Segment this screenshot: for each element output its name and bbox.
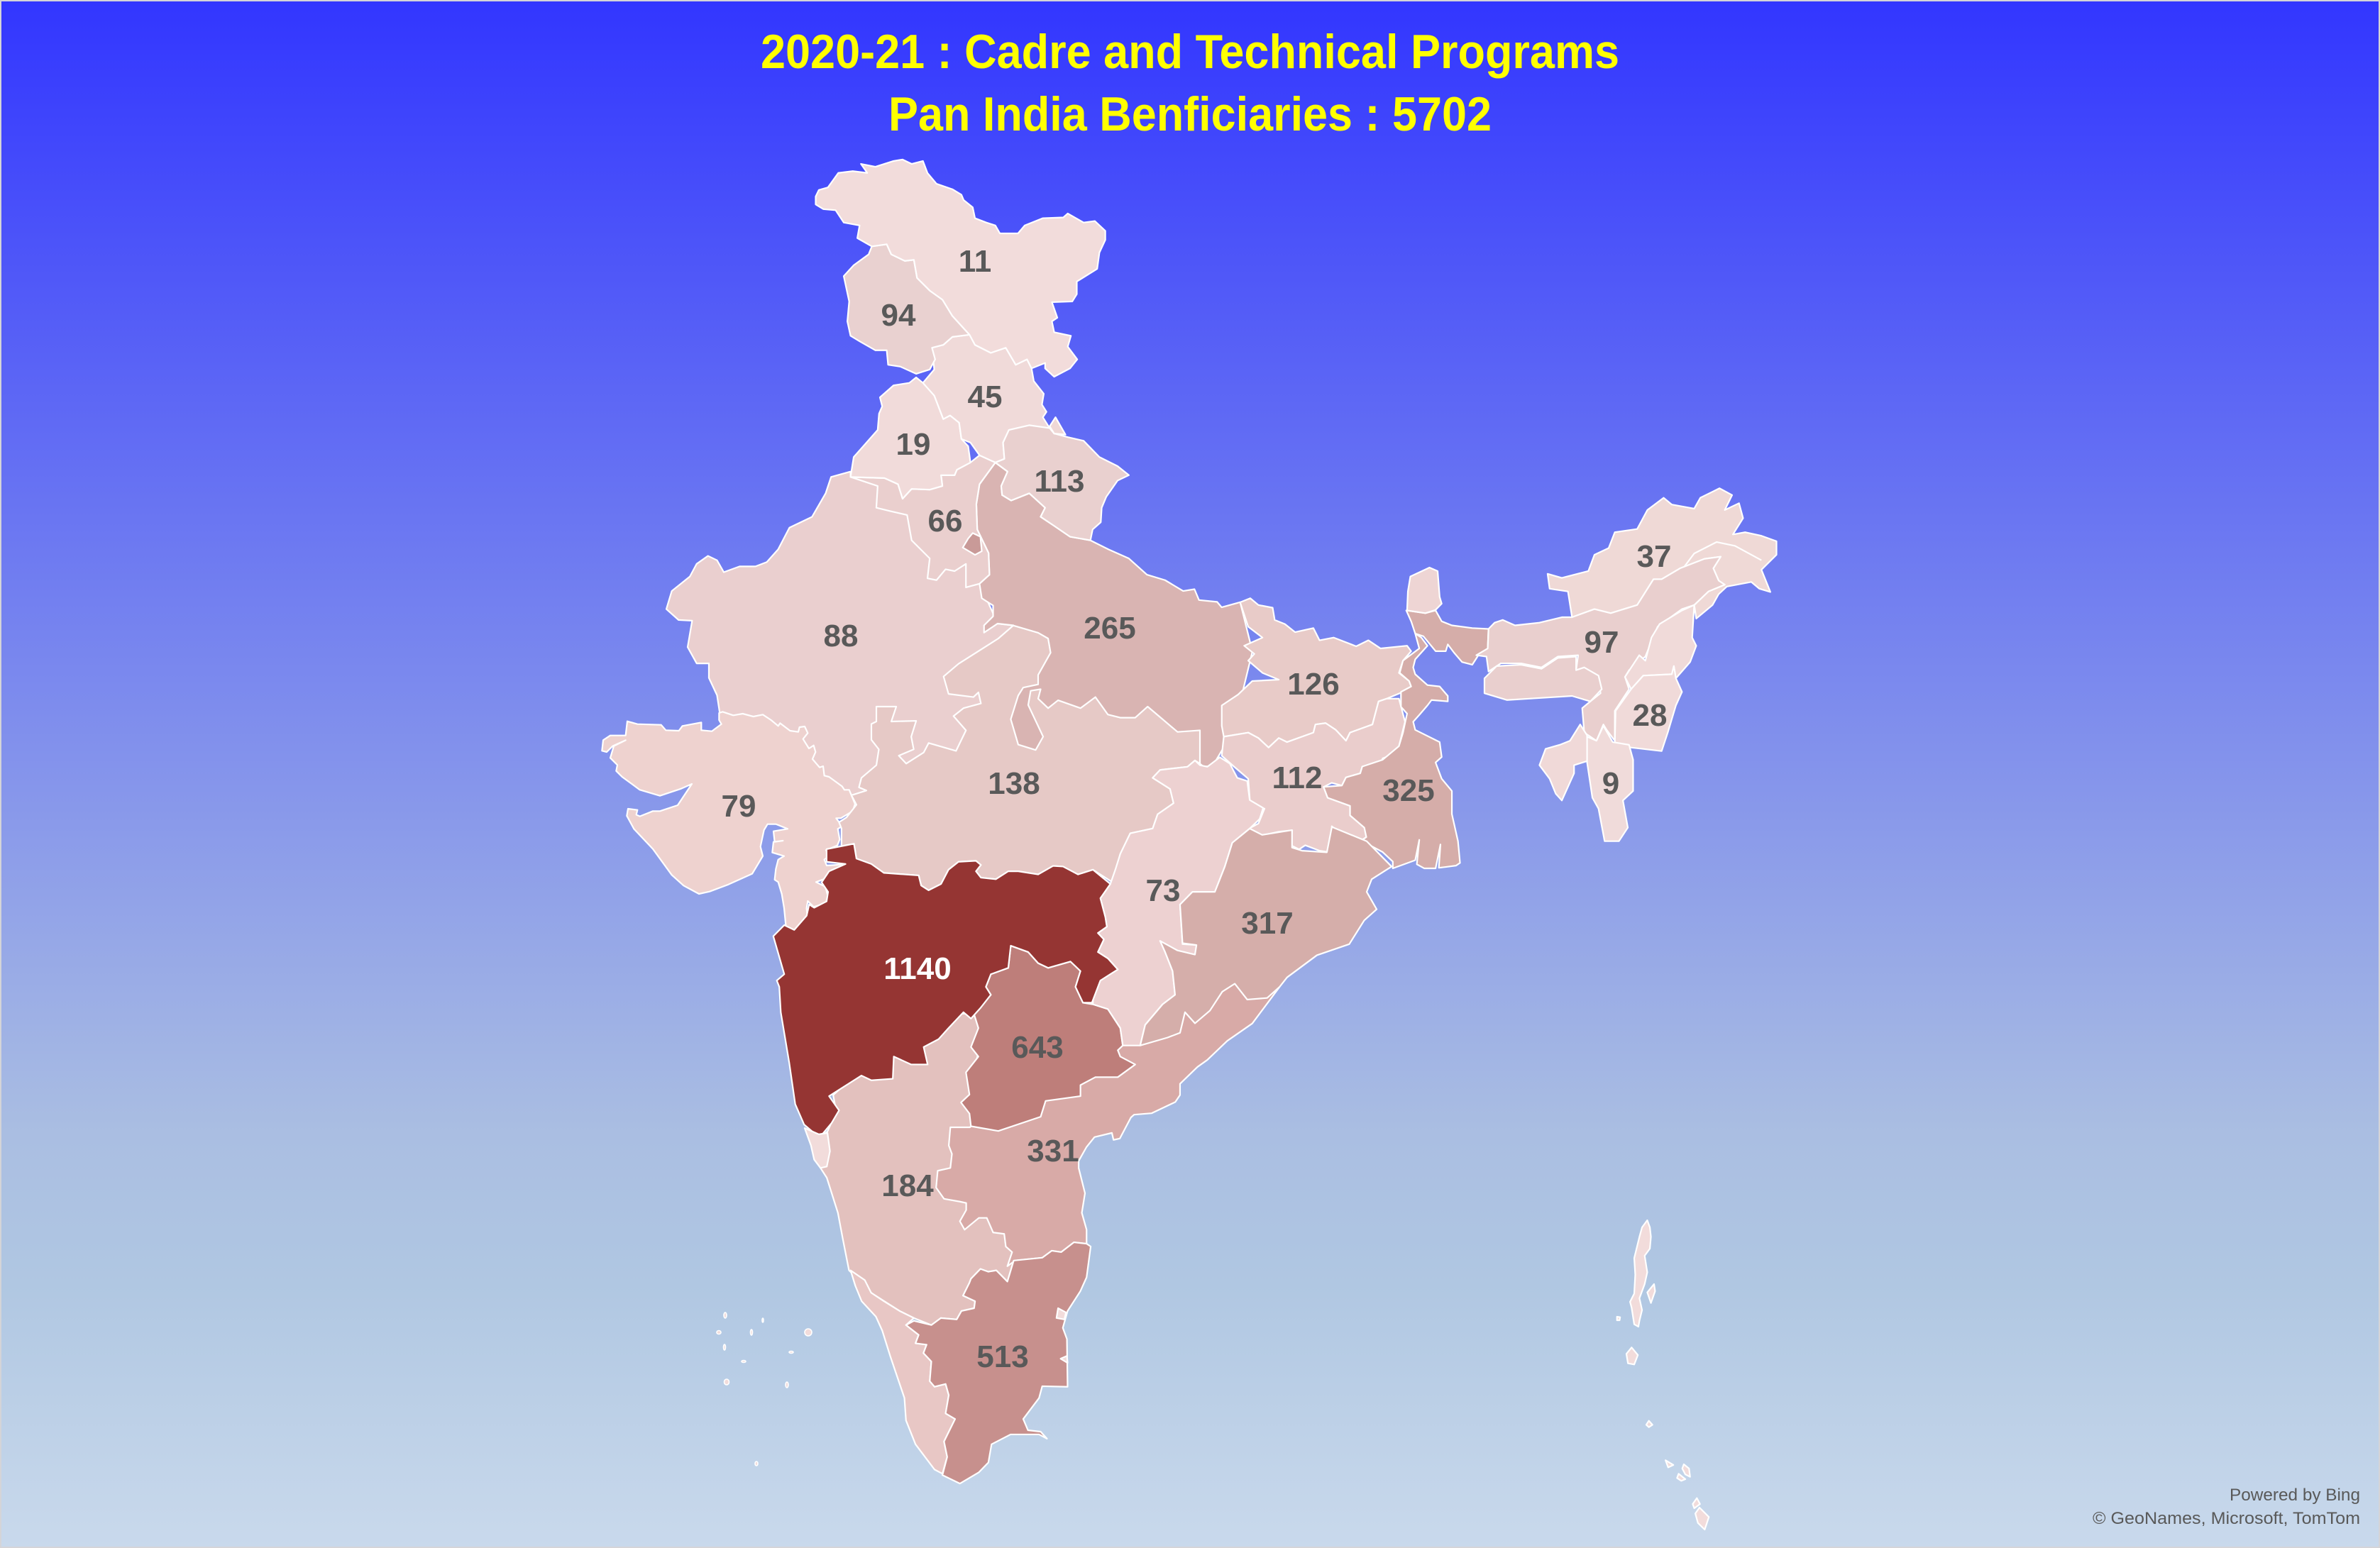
value labels per state: 138 xyxy=(988,766,1040,801)
state: Karnataka xyxy=(820,1014,1026,1325)
Lakshadweep islands xyxy=(717,1312,812,1466)
title xyxy=(761,25,1619,141)
island: Great Nicobar xyxy=(1695,1508,1709,1530)
state: Chhattisgarh xyxy=(1093,757,1263,1046)
state: Rajasthan xyxy=(666,472,1020,797)
state: Uttar Pradesh xyxy=(976,463,1252,767)
state: Andhra Pradesh xyxy=(936,980,1279,1266)
map credits: © GeoNames, Microsoft, TomTom xyxy=(2093,1509,2360,1528)
state: Bihar xyxy=(1222,598,1411,748)
state: Tamil Nadu xyxy=(906,1242,1091,1483)
island: North and Middle Andaman xyxy=(1630,1220,1651,1327)
value labels per state: 94 xyxy=(881,298,916,333)
value labels per state: 79 xyxy=(722,789,756,824)
state: Mizoram xyxy=(1587,726,1633,841)
state: Uttarakhand xyxy=(996,425,1129,541)
value labels per state: 265 xyxy=(1084,611,1136,646)
state: Gujarat xyxy=(602,712,855,931)
island: Car Nicobar xyxy=(1646,1421,1653,1427)
state: Delhi xyxy=(963,533,982,555)
territory: Karaikal xyxy=(1061,1356,1067,1363)
state: Assam xyxy=(1476,557,1725,741)
state: Telangana xyxy=(961,946,1135,1131)
value labels per state: 37 xyxy=(1637,539,1671,574)
value labels per state: 184 xyxy=(881,1168,934,1203)
value labels per state: 126 xyxy=(1287,667,1340,702)
value labels per state: 73 xyxy=(1146,873,1180,908)
Arunachal inner boundary xyxy=(1684,542,1761,567)
state: Sikkim xyxy=(1407,568,1442,613)
value labels per state: 28 xyxy=(1633,698,1667,733)
map credits: Powered by Bing xyxy=(2230,1486,2360,1505)
state: Meghalaya xyxy=(1484,657,1602,702)
Andaman and Nicobar islands xyxy=(1617,1220,1709,1530)
island: Little Andaman xyxy=(1626,1347,1638,1364)
state: Manipur xyxy=(1615,666,1682,751)
value labels per state: 97 xyxy=(1585,625,1619,660)
state: Arunachal Pradesh xyxy=(1548,488,1777,619)
value labels per state: 88 xyxy=(824,619,858,653)
title: 2020-21 : Cadre and Technical Programs xyxy=(761,25,1619,79)
island: North Sentinel xyxy=(1617,1317,1620,1320)
island: Nancowry xyxy=(1682,1464,1690,1477)
territory: Puducherry xyxy=(1057,1308,1066,1320)
island: Ritchie xyxy=(1647,1284,1655,1303)
value labels per state: 317 xyxy=(1241,906,1294,941)
state: Himachal Pradesh xyxy=(923,335,1052,463)
state: Punjab xyxy=(851,377,971,499)
sliver north of Uttarakhand xyxy=(1049,417,1066,435)
value labels per state: 66 xyxy=(928,504,962,538)
value labels per state: 1140 xyxy=(883,951,952,986)
state: Maharashtra xyxy=(773,844,1118,1135)
value labels per state: 513 xyxy=(976,1339,1029,1374)
map of India by state xyxy=(602,160,1777,1530)
value labels per state: 325 xyxy=(1382,773,1435,808)
state: Goa xyxy=(805,1128,830,1168)
state: Haryana xyxy=(851,455,996,587)
value labels per state: 112 xyxy=(1272,761,1322,795)
map credits xyxy=(2093,1486,2360,1528)
value labels per state: 113 xyxy=(1035,464,1084,499)
state: Nagaland xyxy=(1625,605,1696,689)
island: Katchal xyxy=(1677,1474,1685,1481)
state: Odisha xyxy=(1140,827,1392,1046)
state: Tripura xyxy=(1539,724,1587,800)
state: Madhya Pradesh xyxy=(839,626,1200,890)
value labels per state: 331 xyxy=(1027,1134,1079,1168)
state: Jharkhand xyxy=(1222,699,1405,852)
value labels per state: 11 xyxy=(959,244,991,279)
state: Kerala xyxy=(851,1271,955,1474)
island: Little Nicobar xyxy=(1692,1498,1700,1508)
title: Pan India Benficiaries : 5702 xyxy=(888,87,1492,141)
state: Jammu and Kashmir and Ladakh xyxy=(815,160,1106,377)
state: Jammu region xyxy=(844,244,969,374)
value labels per state xyxy=(722,244,1671,1374)
value labels per state: 643 xyxy=(1011,1030,1064,1065)
state: North Bengal xyxy=(1406,610,1489,665)
value labels per state: 9 xyxy=(1602,766,1619,801)
value labels per state: 19 xyxy=(896,427,930,462)
value labels per state: 45 xyxy=(968,380,1002,414)
state: West Bengal xyxy=(1323,634,1460,868)
island: Teressa xyxy=(1665,1460,1673,1467)
